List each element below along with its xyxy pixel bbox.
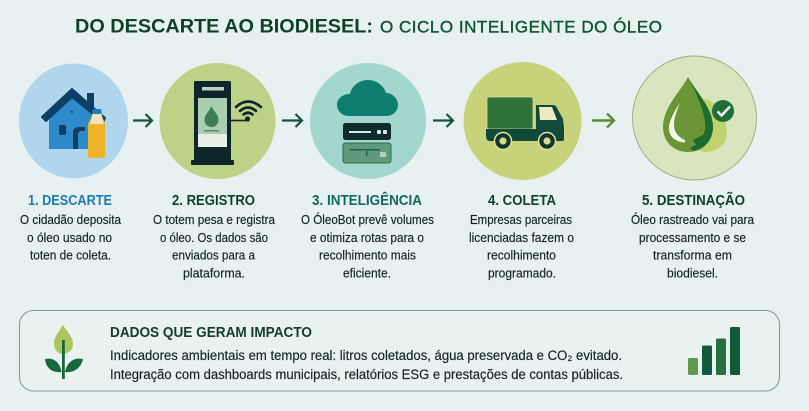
step 1 text: O cidadão deposita — [20, 212, 122, 227]
step 1 text: 1. DESCARTE — [28, 193, 112, 209]
icon: cloud and servers — [310, 63, 426, 179]
step 3 text: eficiente. — [343, 266, 391, 280]
panel text: Indicadores ambientais em tempo real: litros coletados, água preservada e CO₂ evitado. — [110, 348, 622, 363]
icon: totem with wifi — [160, 63, 276, 179]
step 3 text: 3. INTELIGÊNCIA — [312, 191, 422, 209]
step 3 text — [301, 191, 434, 280]
step 1 text — [20, 193, 122, 262]
step 4 text — [469, 193, 574, 280]
step 3 text: e otimiza rotas para o — [310, 230, 424, 245]
step 5 text — [631, 191, 755, 280]
step 4 text: programado. — [488, 266, 556, 280]
step 1 text: toten de coleta. — [30, 248, 111, 262]
step 4 text: licenciadas fazem o — [469, 230, 574, 245]
step 2 text: enviados para a — [172, 248, 256, 262]
step 5 text: Óleo rastreado vai para — [631, 212, 755, 227]
icon: sprout — [45, 325, 83, 379]
title — [75, 16, 662, 38]
step 2 text: O totem pesa e registra — [153, 212, 276, 227]
step 2 text: plataforma. — [183, 266, 245, 280]
step 5 text: biodiesel. — [667, 266, 718, 280]
step 2 text: 2. REGISTRO — [172, 193, 255, 209]
title: O CICLO INTELIGENTE DO ÓLEO — [380, 18, 662, 36]
step 3 text: O ÓleoBot prevê volumes — [301, 212, 434, 227]
step 2 text — [153, 193, 276, 280]
icon: truck — [464, 62, 582, 180]
icon: bar chart — [688, 327, 740, 375]
step 5 text: 5. DESTINAÇÃO — [642, 191, 745, 209]
arrow 4 — [592, 114, 614, 128]
step 1 text: o óleo usado no — [27, 230, 112, 245]
step 4 text: Empresas parceiras — [470, 212, 572, 227]
step 4 text: recolhimento — [487, 248, 556, 262]
panel text: Integração com dashboards municipais, relatórios ESG e prestações de contas públicas. — [110, 367, 623, 382]
arrow 3 — [433, 114, 453, 127]
title: DO DESCARTE AO BIODIESEL: — [75, 16, 373, 38]
step 4 text: 4. COLETA — [488, 193, 556, 209]
arrow 1 — [133, 114, 152, 127]
icon: oil drop with check — [632, 56, 756, 180]
step 3 text: recolhimento mais — [319, 248, 416, 262]
step 5 text: processamento e se — [639, 230, 746, 245]
arrow 2 — [282, 114, 302, 127]
panel text — [110, 348, 623, 382]
panel heading: DADOS QUE GERAM IMPACTO — [110, 325, 312, 341]
step 5 text: transforma em — [653, 248, 732, 262]
icon: house and oil bottle — [19, 64, 128, 178]
step 2 text: o óleo. Os dados são — [160, 230, 268, 245]
panel: impact data — [20, 310, 780, 391]
